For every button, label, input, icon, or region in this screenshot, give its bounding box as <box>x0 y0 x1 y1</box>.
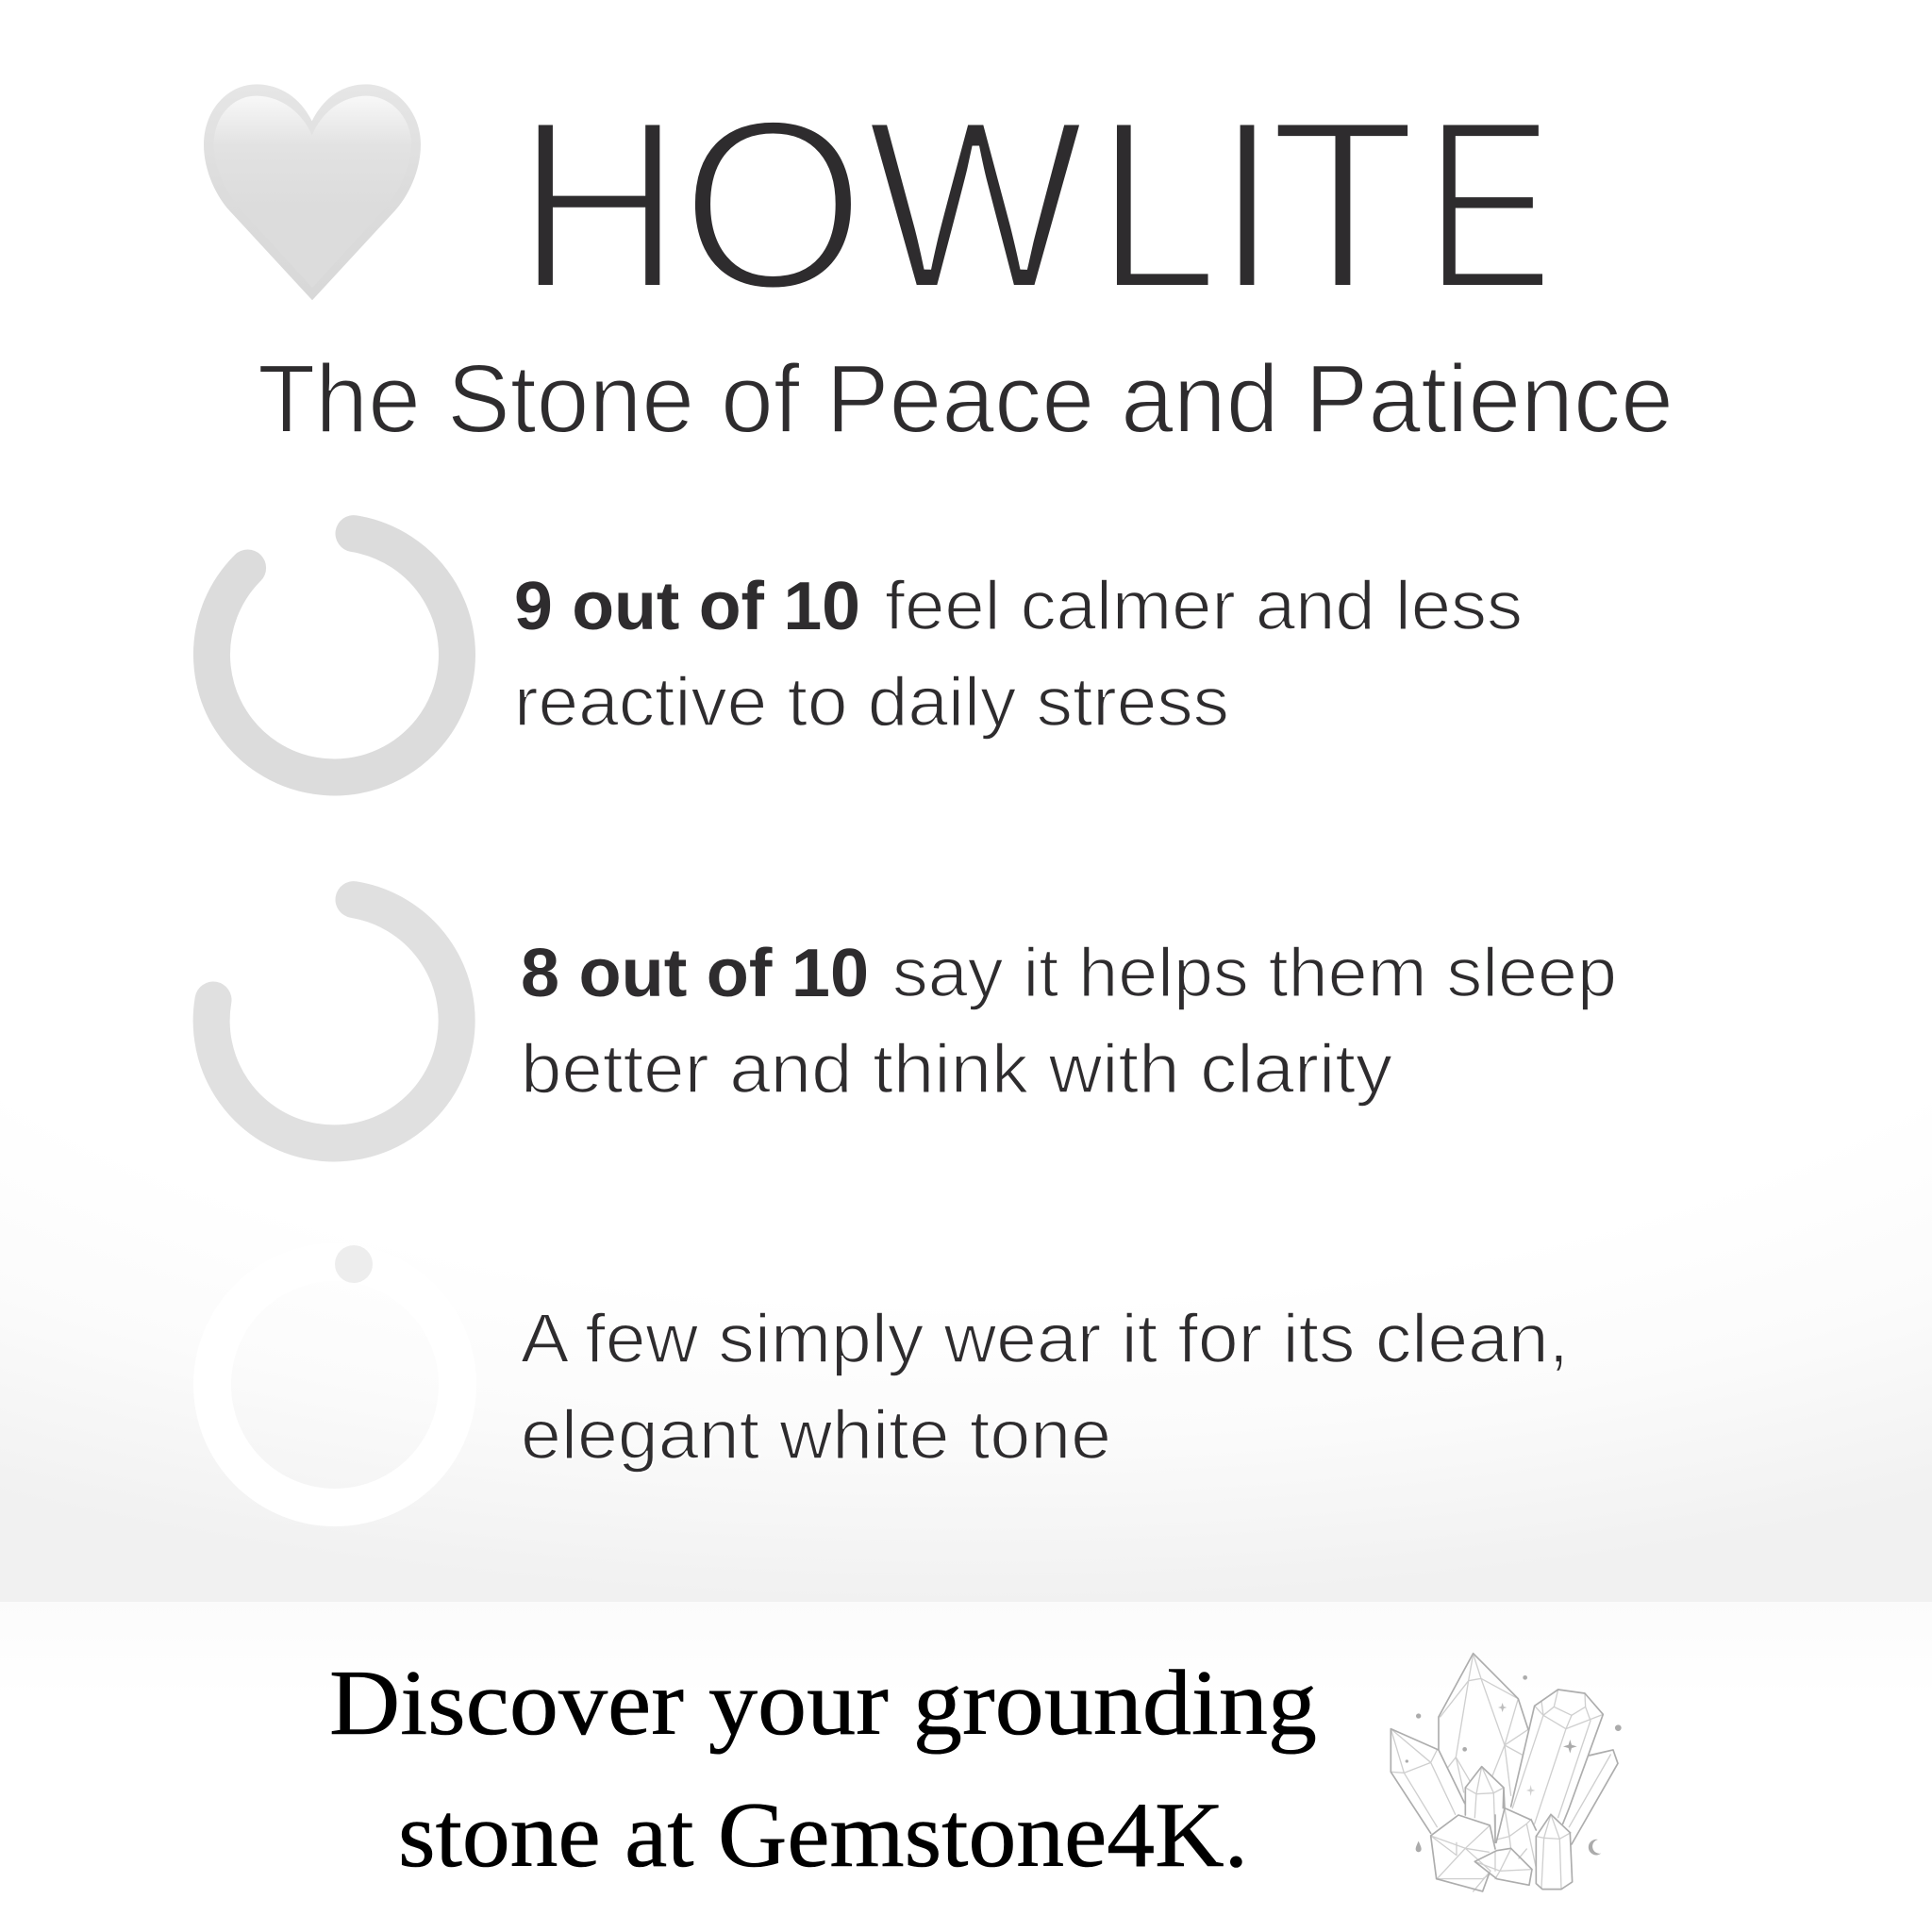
progress ring: 8 out of 10 <box>211 900 457 1143</box>
text: a few wear it: elegant white tone <box>521 1397 1111 1474</box>
call to action: Discover your grounding <box>329 1652 1317 1755</box>
text: 9 out of 10 stat: feel calmer and less <box>885 568 1523 644</box>
icon: crystal cluster <box>1391 1654 1622 1891</box>
title: T <box>1269 68 1417 341</box>
title: L <box>1095 68 1219 341</box>
title: E <box>1424 68 1554 341</box>
text: 9 out of 10 stat: 9 out of 10 <box>514 569 860 644</box>
title: H <box>516 68 682 341</box>
text: a few wear it: A few simply wear it for its clean, <box>521 1301 1569 1377</box>
text: 8 out of 10 stat <box>521 935 1617 1108</box>
text: 8 out of 10 stat: say it helps them sleep <box>892 935 1617 1011</box>
text: 9 out of 10 stat: reactive to daily stress <box>514 664 1229 741</box>
title: W <box>866 68 1087 341</box>
call to action <box>329 1652 1317 1887</box>
title: I <box>1216 68 1278 341</box>
call to action: stone at Gemstone4K. <box>398 1784 1248 1887</box>
text: 8 out of 10 stat: better and think with clarity <box>521 1031 1393 1108</box>
progress ring: 9 out of 10 <box>211 534 457 777</box>
text: a few wear it <box>521 1301 1569 1474</box>
subtitle: The Stone of Peace and Patience <box>258 344 1674 453</box>
text: 8 out of 10 stat: 8 out of 10 <box>521 936 869 1011</box>
progress ring: a few <box>212 1245 458 1507</box>
title: O <box>680 68 866 341</box>
text: 9 out of 10 stat <box>514 568 1523 741</box>
icon: white heart <box>204 84 421 300</box>
